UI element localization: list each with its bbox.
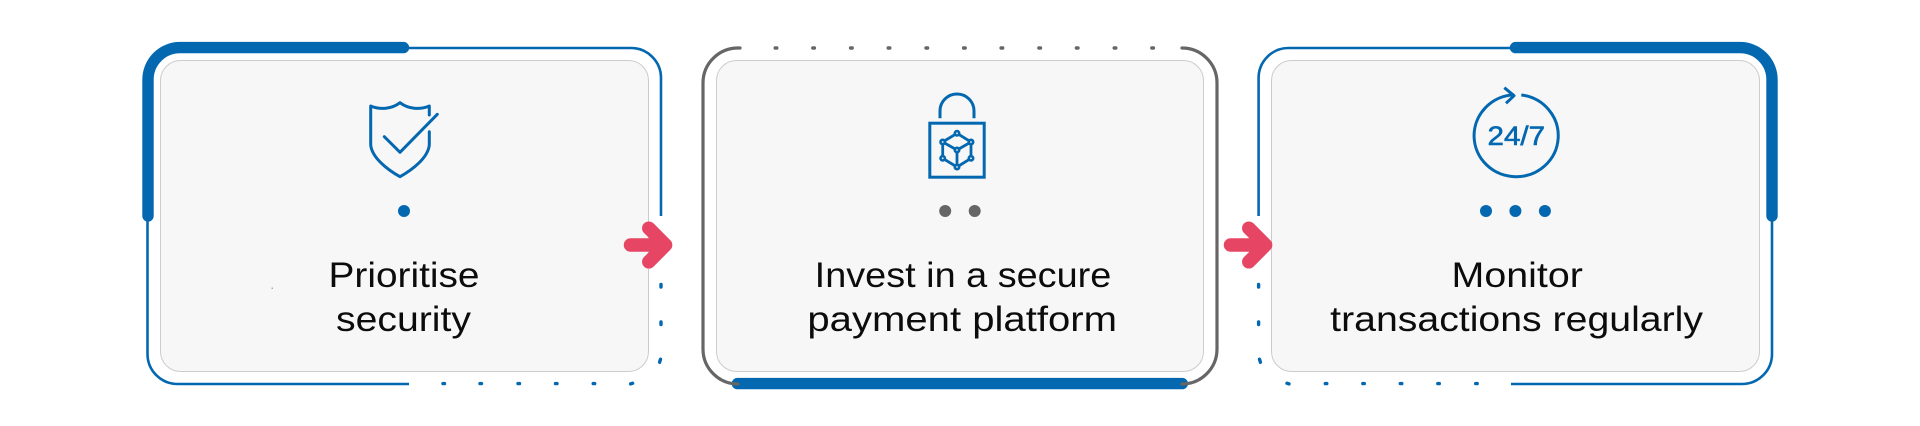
frame: thin solid outline <box>148 48 661 384</box>
frame: grey corners <box>703 48 1217 384</box>
card background <box>716 60 1204 372</box>
heading: transactions regularly <box>1330 300 1704 339</box>
icon: padlock with cube <box>930 94 984 177</box>
step marker: three dots <box>1480 205 1551 217</box>
icon: 24/7 clock <box>1474 88 1558 177</box>
arrow: step one to step two <box>630 228 666 262</box>
frame: dotted corner <box>443 284 661 384</box>
icon: 24/7 clock: 24/7 <box>1488 121 1545 151</box>
frame: dotted corner <box>1259 284 1477 384</box>
arrow: step two to step three <box>1230 228 1266 262</box>
heading: payment platform <box>807 300 1117 339</box>
heading: Monitor <box>1452 256 1583 295</box>
frame: thick accent corner <box>148 48 404 216</box>
heading: Prioritise <box>328 256 480 295</box>
icon: shield with check <box>371 103 437 177</box>
step marker: two dots <box>939 205 981 217</box>
panel: monitor transactions <box>1259 48 1772 384</box>
step marker: one dot <box>398 205 410 217</box>
card background <box>1272 60 1760 372</box>
heading <box>1330 256 1704 339</box>
panel: secure payment platform <box>703 48 1217 384</box>
frame: thick bottom bar <box>737 378 1182 389</box>
panel: prioritise security <box>148 48 661 384</box>
frame: thin solid outline <box>1259 48 1772 384</box>
frame: dotted top <box>775 46 1153 50</box>
heading <box>807 256 1117 339</box>
heading: Invest in a secure <box>815 256 1111 295</box>
frame: thick accent corner <box>1516 48 1772 216</box>
speck <box>272 288 273 289</box>
heading <box>328 256 480 339</box>
heading: security <box>336 300 472 339</box>
card background <box>160 60 648 372</box>
